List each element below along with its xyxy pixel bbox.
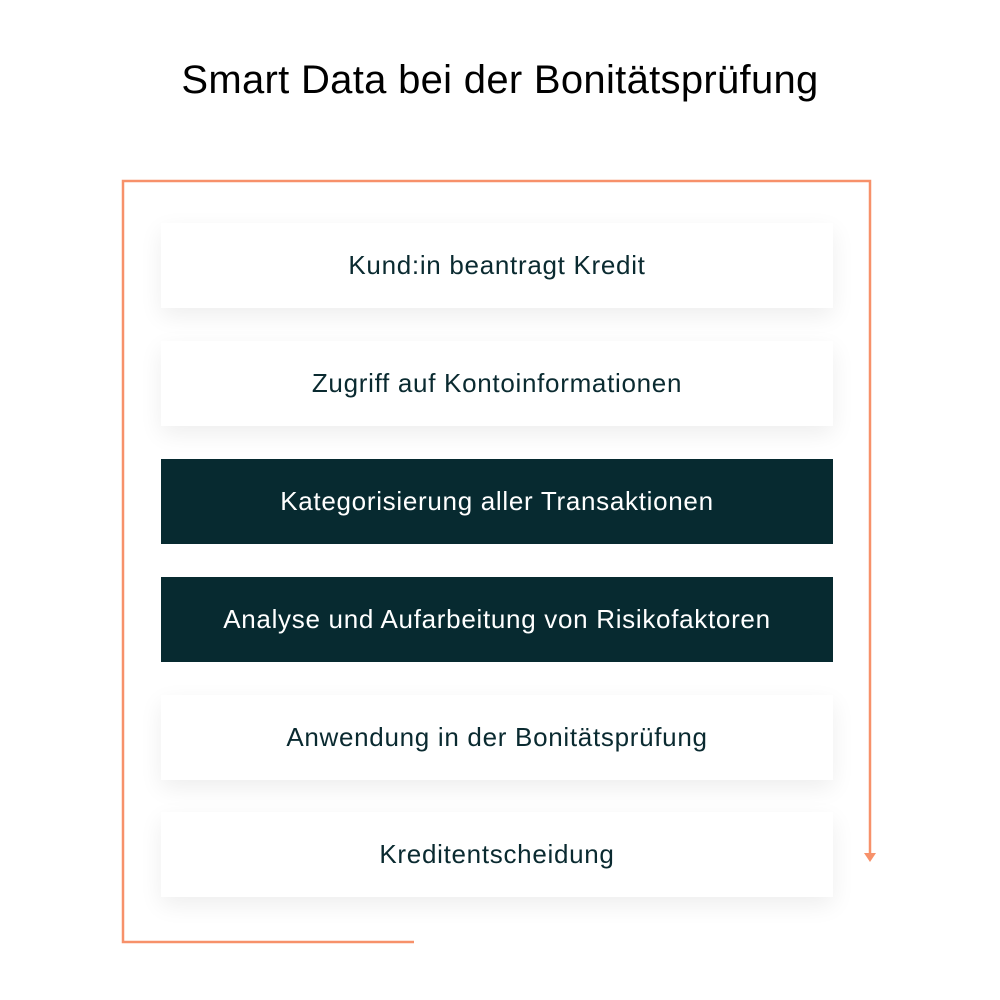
step 2 <box>161 341 833 426</box>
step 1: Kund:in beantragt Kredit <box>348 250 646 280</box>
step 3 <box>161 459 833 544</box>
step 5 <box>161 695 833 780</box>
step 2: Zugriff auf Kontoinformationen <box>312 368 682 398</box>
step 6 <box>161 812 833 897</box>
step 5: Anwendung in der Bonitätsprüfung <box>286 722 708 752</box>
step 3: Kategorisierung aller Transaktionen <box>280 486 714 516</box>
step 1 <box>161 223 833 308</box>
step 6: Kreditentscheidung <box>379 839 615 869</box>
step 4: Analyse und Aufarbeitung von Risikofaktoren <box>223 604 771 634</box>
step 4 <box>161 577 833 662</box>
title: Smart Data bei der Bonitätsprüfung <box>181 58 819 102</box>
